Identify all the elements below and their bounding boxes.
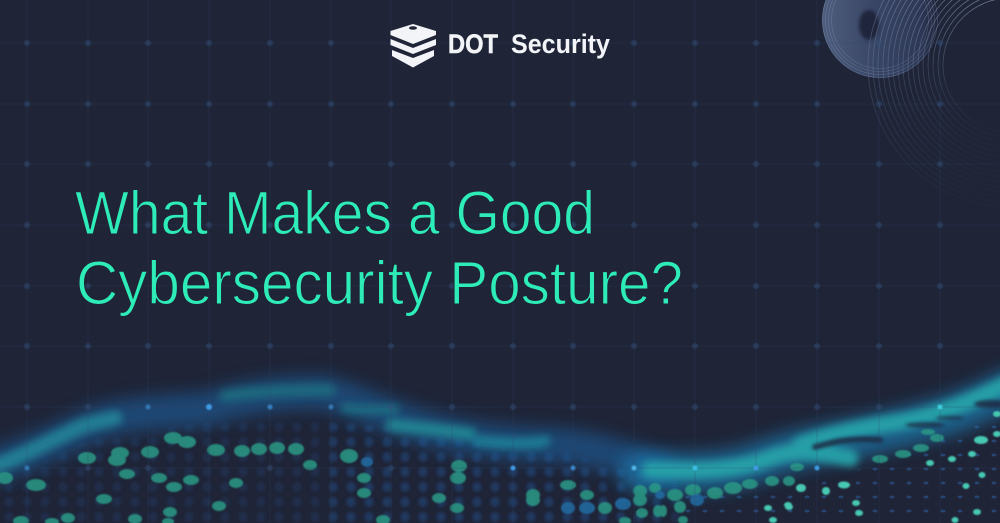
- logo wordmark: DOT: [448, 29, 498, 59]
- logo: [390, 24, 610, 68]
- wave: small bright points: [764, 411, 1000, 523]
- wave: bright data points: [0, 429, 944, 523]
- icon: layered stack: [390, 24, 436, 68]
- wave: dim dot field: [0, 415, 1000, 523]
- glowing grid nodes: [24, 404, 942, 470]
- decoration: ring sphere: [822, 0, 938, 78]
- wave: glowing band: [0, 385, 1000, 472]
- logo wordmark: Security: [511, 29, 610, 59]
- background grid nodes: [24, 40, 943, 471]
- title: [75, 179, 683, 317]
- title line 1: What Makes a Good: [75, 179, 595, 247]
- decoration: large concentric rings: [868, 0, 1000, 207]
- wave: blue data points: [361, 457, 704, 514]
- logo wordmark: [448, 29, 610, 59]
- title line 2: Cybersecurity Posture?: [76, 249, 683, 317]
